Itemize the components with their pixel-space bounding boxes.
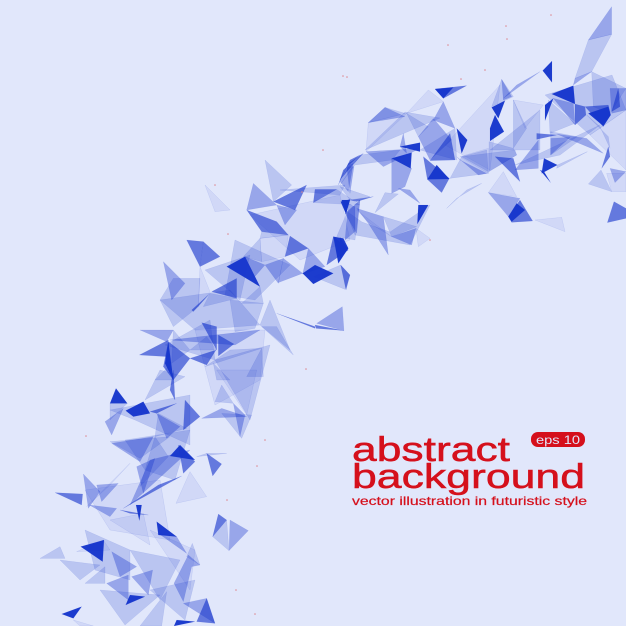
scattered node dots [85, 14, 552, 615]
connective light mesh band [60, 75, 626, 625]
badge: eps 10: eps 10 [536, 433, 580, 447]
triangle mesh: middle cluster [139, 155, 360, 380]
subtitle: vector illustration in futuristic style [352, 494, 587, 508]
title: abstract background: abstract [352, 431, 511, 469]
title: abstract background: background [352, 458, 585, 496]
triangle mesh: upper right cluster [340, 7, 626, 260]
badge: eps 10 [531, 432, 585, 447]
triangle mesh: lower left cluster [40, 370, 257, 626]
title: abstract background [352, 431, 585, 496]
